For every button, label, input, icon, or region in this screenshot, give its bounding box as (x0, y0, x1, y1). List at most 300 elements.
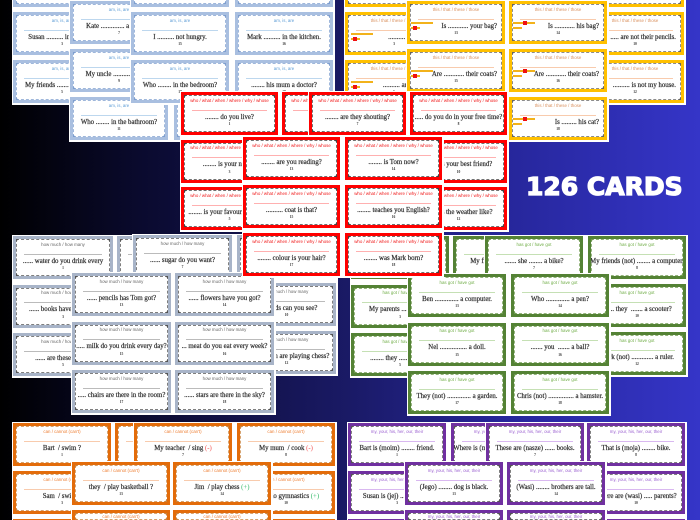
card 7: 7 (182, 265, 183, 269)
set: how much how many, right page (132, 234, 338, 376)
card 18 (511, 371, 609, 414)
card 10: this / that / these / those (612, 18, 658, 22)
card 7: can / cannot (can't) (164, 428, 202, 434)
card 8: My mum / cook (-) (259, 444, 313, 452)
card 18: Is ......... his cat? (555, 118, 599, 126)
card 7 (134, 423, 232, 466)
card 18: 18 (556, 127, 560, 131)
card 9: 9 (118, 79, 120, 83)
card 11: Who ........ in the bathroom? (81, 118, 157, 126)
card 1: who / what / when / where / why / whose (190, 98, 269, 102)
card 15: 15 (120, 352, 123, 356)
card 14 (511, 274, 609, 317)
card 14: Is ............ his bag? (548, 22, 599, 30)
card 17: 17 (120, 400, 123, 404)
card 8: who / what / when / where / why / whose (419, 98, 498, 102)
card 8: my, your, his, her, our, their (610, 428, 662, 434)
card 10 (587, 471, 685, 514)
card 17: ..... chairs are there in the room? (78, 392, 165, 398)
card 16 (345, 185, 442, 228)
card 3: 3 (396, 501, 398, 505)
set: possessive adjectives, centre page (404, 461, 607, 520)
card 8: ..... do you do in your free time? (415, 114, 502, 120)
card 7: has got / have got (517, 242, 551, 246)
card 5: has got / have got (383, 338, 417, 344)
card 12: ........ is the weather like? (425, 208, 492, 216)
card 13: who / what / when / where / why / whose (252, 142, 331, 148)
card 14: Who .............. a pen? (531, 296, 589, 302)
card 15 (407, 49, 505, 92)
card 12: am, is, are (213, 102, 233, 108)
card 14 (173, 462, 271, 505)
card 8 (587, 423, 685, 466)
card 12: Mark (not) ............. a ruler. (600, 354, 674, 360)
card 15: 15 (455, 352, 459, 356)
card 16: how much / how many (203, 327, 246, 332)
card 12: 12 (221, 127, 225, 131)
card 16: 16 (558, 352, 562, 356)
card 2: Where is (moja) ........ school bag? (453, 444, 547, 452)
card 1: my, your, his, her, our, their (371, 428, 423, 434)
card 13: (Jego) ........ dog is black. (420, 484, 488, 490)
card 2: can / cannot (can't) (145, 428, 183, 434)
card 16: ... meat do you eat every week? (182, 343, 267, 350)
card 16 (507, 510, 605, 520)
title: 126 CARDS (526, 172, 683, 201)
card 14: ........ is Tom now? (368, 158, 419, 166)
card 12: has got / have got (620, 338, 654, 342)
card 12 (237, 331, 336, 374)
card 2 (282, 92, 379, 135)
set: question words, left page (180, 91, 381, 232)
card 13: 13 (452, 492, 456, 496)
card 1 (348, 423, 446, 466)
set: how much how many, left page (12, 235, 219, 378)
card 10 (237, 283, 336, 326)
card 8 (237, 235, 336, 278)
card 15: how much / how many (100, 327, 143, 332)
card 7: 7 (534, 453, 536, 457)
card 10: ....... they ....... a scooter? (602, 306, 672, 312)
card 5: My friends .......... at home. (25, 82, 99, 88)
card 8: 8 (635, 453, 637, 457)
set: am is are, right page (130, 0, 335, 105)
card 18: how much / how many (203, 376, 246, 380)
card 12 (174, 97, 272, 140)
card 8 (586, 0, 684, 7)
card 13 (131, 0, 229, 7)
card 10 (586, 12, 684, 55)
card 17: 17 (455, 401, 459, 405)
card 3: 3 (399, 314, 401, 318)
card 15: Are ............ their coats? (432, 70, 497, 78)
card 13: 13 (120, 303, 123, 307)
card 18: 18 (223, 400, 226, 404)
card 10: has got / have got (620, 290, 654, 294)
card 7: 7 (533, 266, 535, 270)
card 17: am, is, are (170, 66, 190, 70)
card 15: Nel ................ a doll. (428, 344, 486, 351)
card 3: how much / how many (41, 290, 85, 295)
card 1 (13, 236, 113, 279)
card 7: 7 (182, 453, 184, 457)
card 12 (588, 332, 686, 375)
set: possessive adjectives, right page (485, 422, 687, 520)
set: how much how many, centre page (71, 272, 276, 415)
card 13: can / cannot (can't) (102, 468, 140, 472)
card 1 (13, 423, 111, 466)
card 14: 14 (556, 31, 560, 35)
card 1: has got / have got (383, 242, 417, 246)
card 12: how much / how many (265, 336, 308, 342)
card 5: ........ is your favourite colour? (188, 208, 271, 216)
card 5: 5 (62, 363, 64, 367)
card 16: this / that / these / those (535, 54, 581, 60)
card 16: ........ teaches you English? (357, 206, 430, 214)
card 13: Ben .............. a computer. (422, 296, 492, 302)
card 7 (133, 235, 232, 278)
card 14: has got / have got (543, 280, 577, 284)
card 3 (348, 471, 446, 514)
card 16: ....... you ....... a ball? (531, 344, 589, 351)
card 14: 14 (392, 167, 395, 171)
card 2: 2 (499, 453, 501, 457)
card 15: who / what / when / where / why / whose (252, 190, 331, 196)
card 18: has got / have got (543, 376, 577, 382)
card 5 (348, 519, 446, 520)
card 5 (13, 60, 111, 103)
card 15: 15 (290, 215, 293, 219)
card 5 (351, 333, 449, 376)
card 12: ...... children are playing chess? (244, 352, 329, 360)
card 8: 8 (636, 266, 638, 270)
card 7 (485, 236, 583, 279)
card 18: ........ was Mark born? (364, 254, 423, 262)
card 18: am, is, are (274, 66, 294, 70)
card 1: Bart is (moim) ........ friend. (360, 444, 434, 452)
card 16 (235, 12, 333, 55)
card 8 (410, 92, 507, 135)
card 5: 5 (229, 217, 230, 221)
card 17: 17 (178, 90, 182, 94)
card 16 (511, 322, 609, 366)
card 11 (70, 97, 168, 140)
card 1 (345, 0, 443, 7)
card 10: can / cannot (can't) (267, 476, 305, 482)
card 5: who / what / when / where / why / whose (190, 192, 269, 198)
card 8: 8 (286, 265, 287, 269)
card 7: how much / how many (161, 240, 204, 246)
card 3: 3 (393, 42, 395, 46)
card 2: 2 (501, 266, 503, 270)
set: this that, left page (344, 0, 549, 105)
card 13 (72, 273, 171, 316)
card 17: They (not) .............. a garden. (416, 392, 497, 400)
card 2: who / what / when / where / why / whose (291, 98, 370, 102)
card 10: ..... are not their pencils. (610, 34, 676, 40)
card 18 (509, 97, 607, 140)
card 18: Chris (not) ............... a hamster. (517, 392, 603, 400)
card 5 (345, 60, 443, 103)
card 13: has got / have got (440, 280, 474, 284)
card 14 (507, 462, 605, 505)
card 3 (13, 284, 113, 328)
card 3 (345, 12, 443, 55)
card 3: ...... books have you got? (29, 306, 97, 313)
set: can cannot, right page (133, 422, 337, 520)
card 8: can / cannot (can't) (267, 428, 305, 434)
card 13: ...... pencils has Tom got? (87, 294, 156, 302)
card 1: 1 (396, 453, 398, 457)
card 7 (70, 1, 168, 44)
card 10: Where are (wasi) ..... parents? (595, 492, 677, 500)
card 15: 15 (178, 42, 182, 46)
card 11: 11 (117, 127, 121, 131)
set: can cannot, left page (12, 422, 215, 520)
card 2: 2 (166, 266, 168, 270)
card 12 (237, 519, 335, 520)
card 16: Are ............ their coats? (534, 70, 599, 78)
card 3: can / cannot (can't) (43, 476, 81, 482)
card 18: ........ his mum a doctor? (251, 82, 317, 88)
card 16: who / what / when / where / why / whose (354, 190, 433, 196)
card 15: am, is, are (170, 18, 190, 22)
card 3: has got / have got (383, 290, 417, 295)
card 5: ........ they ........ a cat? (370, 354, 430, 362)
card 14 (175, 273, 274, 316)
card 13 (408, 274, 506, 317)
card 1 (351, 236, 449, 279)
card 9: My uncle ........... a pilot. (86, 70, 152, 78)
card 16: 16 (392, 215, 395, 219)
card 10: ........ is your best friend? (425, 161, 492, 168)
card 14: who / what / when / where / why / whose (354, 142, 433, 148)
card 16: 16 (556, 79, 560, 83)
card 3: this / that / these / those (371, 18, 417, 22)
card 12: 12 (633, 90, 637, 94)
set: can cannot, centre page (71, 461, 273, 520)
card 3: Susan is (jej) ........ sister. (363, 492, 431, 500)
card 2 (115, 423, 213, 466)
card 17: how much / how many (100, 376, 143, 380)
card 12: 12 (457, 217, 460, 221)
card 8: That is (moja) ........ bike. (602, 444, 670, 452)
set: this that, centre page (406, 0, 609, 142)
set: question words, right page (308, 91, 509, 232)
card 3: 3 (229, 170, 230, 174)
card 1 (181, 92, 278, 135)
card 5: 5 (399, 363, 401, 367)
card 5 (13, 519, 111, 520)
card 13: 13 (455, 304, 459, 308)
card 7: who / what / when / where / why / whose (318, 98, 397, 102)
card 18 (175, 370, 274, 413)
card 17 (131, 60, 229, 103)
card 12: 12 (285, 361, 288, 365)
card 2 (453, 236, 551, 279)
card 8 (237, 423, 335, 466)
card 3: Sam / swim ? (43, 492, 81, 500)
card 1: ........ do you live? (205, 114, 254, 120)
card 5: .......... are my toys. (383, 82, 435, 88)
card 14: 14 (220, 492, 224, 496)
card 17 (243, 233, 340, 276)
card 1: can / cannot (can't) (43, 428, 81, 434)
card 10 (237, 471, 335, 514)
card 8 (588, 236, 686, 279)
card 7 (309, 92, 406, 135)
card 15 (131, 12, 229, 55)
card 15: has got / have got (440, 328, 474, 333)
card 7: ...... sugar do you want? (150, 256, 215, 264)
card 7 (486, 423, 584, 466)
card 10: 10 (457, 170, 460, 174)
card 7: My teacher / sing (-) (154, 444, 212, 452)
card 14: my, your, his, her, our, their (530, 468, 582, 472)
card 3: Susan .......... in the park. (28, 34, 96, 40)
card 3: am, is, are (52, 18, 72, 22)
card 16: am, is, are (274, 18, 294, 22)
card 3: who / what / when / where / why / whose (190, 145, 269, 150)
card 16: my, your, his, her, our, their (530, 514, 582, 519)
card 5: am, is, are (52, 66, 72, 70)
card 3: 3 (61, 501, 63, 505)
card 2: my, your, his, her, our, their (474, 428, 526, 434)
card 1: 1 (62, 266, 64, 270)
card 2: 2 (330, 122, 331, 126)
card 12: .......... is not my house. (613, 82, 676, 88)
card 10: how much / how many (265, 288, 308, 294)
card 7: ........ are they shouting? (325, 114, 390, 120)
card 16 (173, 510, 271, 520)
card 16 (509, 49, 607, 92)
card 3: 3 (61, 42, 63, 46)
card 18: who / what / when / where / why / whose (354, 238, 433, 244)
card 7: my, your, his, her, our, their (509, 428, 561, 434)
card 18: 18 (392, 263, 395, 267)
card 13 (407, 1, 505, 44)
card 5 (181, 187, 278, 230)
card 9 (70, 49, 168, 92)
card 2: 2 (163, 453, 165, 457)
card 3 (351, 284, 449, 328)
card 8: My friends (not) ........ a computer. (590, 258, 684, 264)
card 18: this / that / these / those (535, 102, 581, 108)
card 15: .......... coat is that? (266, 206, 317, 214)
card 2 (451, 423, 549, 466)
card 15: my, your, his, her, our, their (428, 514, 480, 519)
card 14: 14 (223, 303, 226, 307)
card 15: can / cannot (can't) (102, 514, 140, 519)
card 16: Mark .......... in the kitchen. (247, 34, 321, 40)
card 1: how much / how many (41, 242, 85, 246)
card 12 (586, 60, 684, 103)
card 1 (13, 0, 111, 7)
set: question words, centre page (242, 136, 444, 278)
card 7: These are (nasze) ...... books. (495, 444, 575, 452)
card 12: who / what / when / where / why / whose (419, 192, 498, 198)
card 17: ........ colour is your hair? (257, 254, 326, 262)
card 3: My parents ........ a car. (369, 306, 431, 313)
card 14 (235, 0, 333, 7)
card 14: 14 (558, 304, 562, 308)
card 14: this / that / these / those (535, 6, 581, 12)
card 17 (72, 370, 171, 413)
card 13 (72, 462, 170, 505)
card 3 (181, 140, 278, 182)
card 8: 8 (285, 453, 287, 457)
card 12 (587, 519, 685, 520)
card 15: 15 (454, 79, 458, 83)
card 15 (72, 510, 170, 520)
card 9: am, is, are (109, 54, 129, 60)
card 13: Is ............ your bag? (441, 22, 497, 30)
card 14 (509, 1, 607, 44)
card 2 (117, 236, 217, 279)
set: possessive adjectives, left page (347, 422, 551, 520)
card 16: has got / have got (543, 328, 577, 333)
card 11: am, is, are (109, 102, 129, 108)
card 14 (345, 137, 442, 180)
card 10: who / what / when / where / why / whose (419, 145, 498, 150)
card 12 (410, 187, 507, 230)
card 13: how much / how many (100, 278, 143, 284)
card 3: 3 (62, 314, 64, 318)
card 1: 1 (61, 453, 63, 457)
card 2: My friends ........ a dog. (470, 258, 534, 264)
card 14: can / cannot (can't) (203, 468, 241, 472)
card 15: I .......... not hungry. (153, 34, 207, 40)
card 10 (588, 284, 686, 327)
card 3 (13, 12, 111, 55)
card 5: 5 (61, 90, 63, 94)
card 18 (345, 233, 442, 276)
card 16: 16 (223, 352, 226, 356)
card 7: 7 (357, 122, 358, 126)
card 16 (175, 322, 274, 364)
card 1: 1 (399, 266, 401, 270)
card 8: how much / how many (265, 240, 308, 246)
card 13 (243, 137, 340, 180)
card 10: 10 (284, 501, 288, 505)
card 3: .......... is her pen. (388, 34, 435, 40)
card 13: ........ are you reading? (261, 158, 322, 166)
card 15: this / that / these / those (433, 54, 479, 60)
card 10: ...... birds can you see? (256, 304, 317, 312)
card 2: how much / how many (145, 242, 189, 246)
card 13: my, your, his, her, our, their (428, 468, 480, 472)
card 14: ...... flowers have you got? (188, 294, 261, 302)
card 13: 13 (119, 492, 123, 496)
card 16: 16 (282, 42, 286, 46)
set: am is are, left page (12, 0, 217, 105)
set: this that, right page (481, 0, 686, 105)
card 5: ...... are these shoes? (35, 354, 91, 362)
card 8: 8 (458, 122, 459, 126)
card 5: this / that / these / those (371, 66, 417, 70)
set: am is are, middle page (69, 0, 274, 142)
card 10: Sue / do gymnastics (+) (253, 492, 319, 500)
card 12: 12 (635, 362, 639, 366)
card 7: 7 (118, 31, 120, 35)
card 7: ....... she ........ a bike? (504, 258, 564, 264)
set: has got have got, right page (484, 235, 688, 377)
card 10: 10 (634, 501, 638, 505)
card 17: 17 (290, 263, 293, 267)
card 10: my, your, his, her, our, their (610, 476, 662, 482)
set: has got have got, left page (350, 235, 553, 378)
card 10: 10 (635, 314, 639, 318)
